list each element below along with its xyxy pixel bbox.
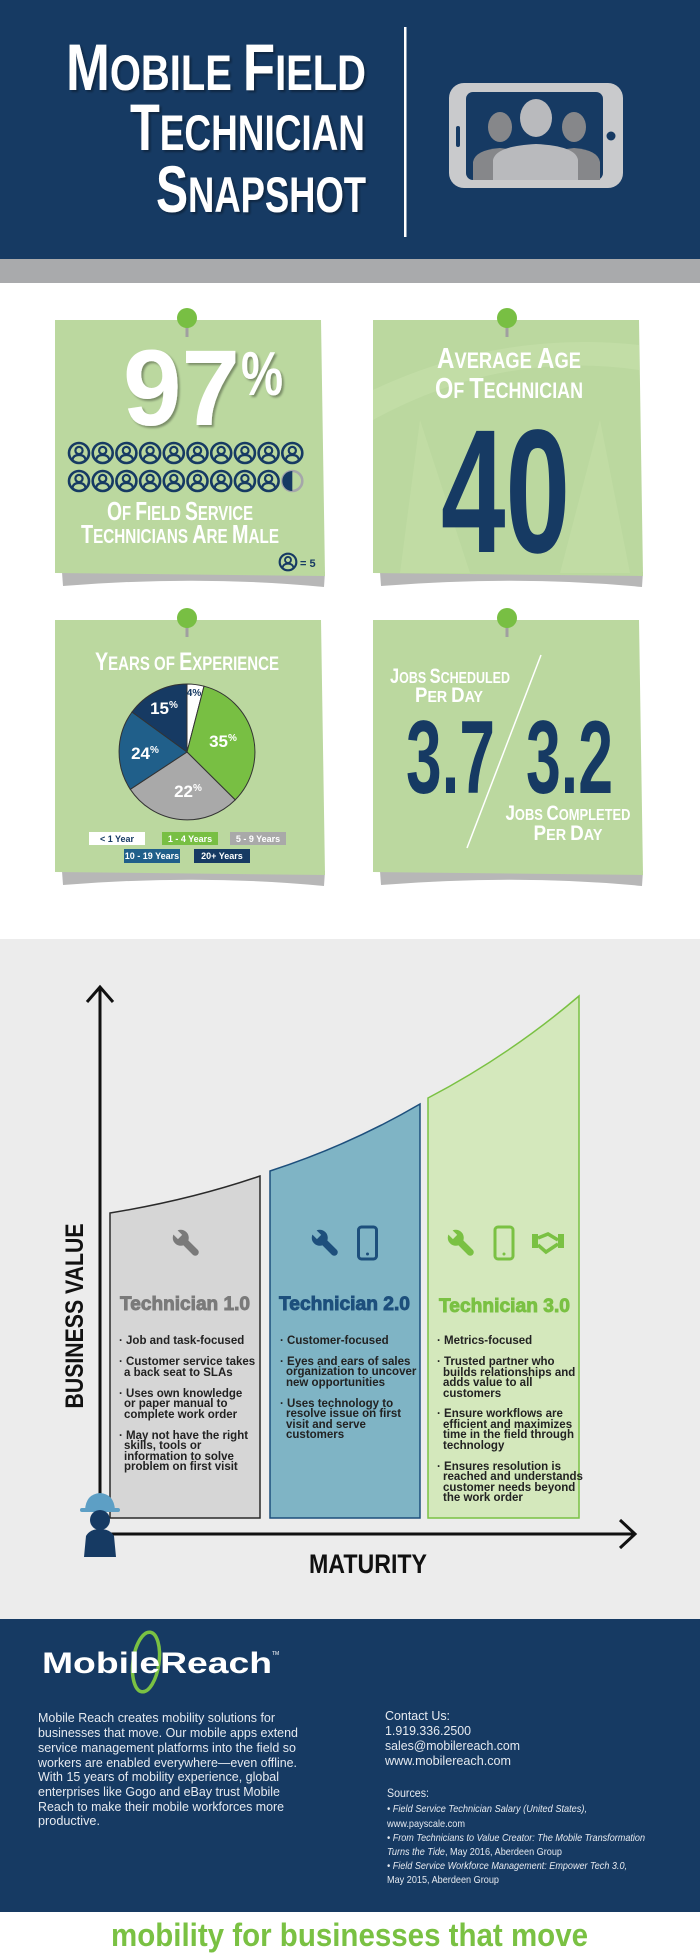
box: technician 3.0: · Metrics-focused [437, 1335, 532, 1347]
sources: Turns the Tide, May 2016, Aberdeen Group [387, 1846, 562, 1858]
stat: 3.7 / 3.2: 3.7 [406, 700, 495, 816]
box: technician 3.0: · Ensures resolution is [437, 1461, 561, 1473]
box: technician 2.0: Technician 2.0 [279, 1294, 410, 1315]
legend: < 1 Year [100, 834, 135, 844]
stat: 97%: 97 [123, 327, 240, 448]
legend: 5 - 9 Years [236, 834, 280, 844]
title: TECHNICIAN [130, 90, 365, 164]
heading: OF TECHNICIAN [435, 373, 583, 405]
card: jobs per day [373, 608, 643, 886]
about text: businesses that move. Our mobile apps extend [38, 1725, 298, 1740]
arrow: y axis [87, 987, 113, 1534]
label: jobs scheduled: JOBS SCHEDULED [390, 665, 510, 688]
sources [386, 1786, 645, 1886]
box: technician 2.0: new opportunities [286, 1377, 385, 1389]
box: technician 1.0: · Uses own knowledge [119, 1388, 242, 1400]
about text: service management platforms into the field so [38, 1740, 296, 1755]
contact: sales@mobilereach.com [385, 1738, 520, 1753]
logo: MobileReach: TM [272, 1651, 279, 1657]
stat: 97%: % [241, 340, 283, 409]
sources: • From Technicians to Value Creator: The Mobile Transformation [387, 1832, 645, 1844]
logo: MobileReach [42, 1630, 279, 1694]
label: jobs completed: JOBS COMPLETED [506, 802, 630, 825]
box: technician 1.0: skills, tools or [124, 1440, 202, 1452]
contact [384, 1708, 520, 1768]
sources: Sources: [387, 1786, 429, 1800]
pie chart: % [228, 733, 237, 744]
tagline: mobility for businesses that move [111, 1917, 588, 1953]
box: technician 1.0: a back seat to SLAs [124, 1367, 233, 1379]
label: jobs completed [506, 802, 630, 845]
box: technician 3.0: technology [443, 1440, 505, 1452]
box: technician 3.0: builds relationships and [443, 1367, 575, 1379]
sources: • Field Service Workforce Management: Empower Tech 3.0, [387, 1860, 627, 1872]
box: technician 1.0: · Customer service takes [119, 1356, 255, 1368]
box: technician 1.0: Technician 1.0 [120, 1294, 250, 1315]
contact: 1.919.336.2500 [385, 1723, 471, 1738]
icon: wrench [168, 1225, 203, 1260]
box: technician 2.0: resolve issue on first [286, 1408, 401, 1420]
box: technician 1.0: · Job and task-focused [119, 1335, 244, 1347]
box: technician 3.0: · Ensure workflows are [437, 1408, 563, 1420]
icon: phone [495, 1227, 513, 1259]
pie chart [119, 684, 255, 820]
card: years of experience [55, 608, 325, 886]
pie chart: % [193, 783, 202, 794]
heading [435, 343, 583, 405]
contact: Contact Us: [385, 1708, 450, 1723]
box: technician 3.0: · Trusted partner who [437, 1356, 555, 1368]
sources: • Field Service Technician Salary (United States), [387, 1803, 587, 1815]
title: SNAPSHOT [156, 152, 366, 226]
box: technician 2.0 [270, 1104, 420, 1518]
box: technician 3.0: Technician 3.0 [439, 1296, 570, 1317]
card: 97% male [55, 308, 325, 587]
icon: phone with people [449, 83, 623, 188]
box: technician 3.0: customers [443, 1388, 501, 1400]
box: technician 3.0: efficient and maximizes [443, 1419, 572, 1431]
title [66, 30, 366, 226]
stat: 40: 40 [441, 394, 570, 590]
box: technician 3.0: reached and understands [443, 1471, 583, 1483]
label: jobs scheduled: PER DAY [415, 684, 483, 707]
legend: 1 - 4 Years [168, 834, 212, 844]
caption: OF FIELD SERVICE [107, 496, 253, 526]
header banner [0, 0, 700, 283]
box: technician 1.0: information to solve [124, 1451, 234, 1463]
box: technician 1.0 [110, 1176, 260, 1518]
icon: phone [358, 1227, 376, 1259]
icon: wrench [307, 1225, 342, 1260]
about text: Reach to make their mobile workforces more [38, 1799, 284, 1814]
about text: workers are enabled everywhere—even offline. [37, 1755, 297, 1770]
axis label: business value: BUSINESS VALUE [61, 1224, 89, 1408]
axis label: maturity: MATURITY [309, 1549, 427, 1579]
arrow: x axis [100, 1520, 635, 1548]
box: technician 3.0 [428, 996, 583, 1518]
icon: wrench [443, 1225, 478, 1260]
pie chart: 4% [187, 688, 201, 699]
box: technician 3.0: adds value to all [443, 1377, 532, 1389]
caption: TECHNICIANS ARE MALE [81, 519, 279, 549]
about text: Mobile Reach creates mobility solutions for [38, 1710, 276, 1725]
about text: productive. [38, 1813, 100, 1828]
box: technician 2.0: · Customer-focused [280, 1335, 389, 1347]
sources: www.payscale.com [386, 1818, 465, 1830]
box: technician 1.0: complete work order [124, 1409, 238, 1421]
heading: AVERAGE AGE [437, 343, 581, 375]
heading: YEARS OF EXPERIENCE [95, 648, 279, 676]
contact: www.mobilereach.com [384, 1753, 511, 1768]
box: technician 2.0: customers [286, 1429, 344, 1441]
label: jobs completed: PER DAY [534, 822, 603, 845]
box: technician 1.0: · May not have the right [119, 1430, 248, 1442]
sources: May 2015, Aberdeen Group [387, 1874, 499, 1886]
about text: With 15 years of mobility experience, global [38, 1769, 279, 1784]
pie chart: 22 [174, 782, 193, 801]
maturity chart section [0, 939, 700, 1620]
box: technician 1.0: problem on first visit [124, 1461, 238, 1473]
about text: enterprises like Gogo and eBay trust Mobile [38, 1784, 280, 1799]
legend: icon = 5: = 5 [300, 558, 316, 570]
footer [0, 1619, 700, 1912]
logo: MobileReach: MobileReach [42, 1647, 272, 1680]
about text [37, 1710, 298, 1828]
box: technician 2.0: · Eyes and ears of sales [280, 1356, 410, 1368]
legend: 20+ Years [201, 851, 243, 861]
box: technician 1.0: or paper manual to [124, 1398, 228, 1410]
caption [81, 496, 279, 549]
icon: handshake [532, 1234, 564, 1252]
box: technician 2.0: organization to uncover [286, 1366, 417, 1378]
icon array: 20 people [69, 443, 302, 491]
box: technician 3.0: the work order [443, 1492, 523, 1504]
pie chart: 35 [209, 732, 228, 751]
pie chart: 15 [150, 699, 169, 718]
legend [89, 832, 286, 863]
card: average age [373, 308, 643, 590]
box: technician 2.0: · Uses technology to [280, 1398, 393, 1410]
pie chart: 24 [131, 744, 150, 763]
title: MOBILE FIELD [66, 30, 366, 104]
pie chart: % [150, 745, 159, 756]
pie chart: % [169, 700, 178, 711]
legend: icon = 5 [280, 554, 316, 570]
stat: 3.7 / 3.2: 3.2 [526, 700, 613, 816]
box: technician 2.0: visit and serve [286, 1419, 366, 1431]
legend: 10 - 19 Years [125, 851, 179, 861]
stat: 3.7 / 3.2 [406, 655, 613, 848]
box: technician 3.0: time in the field through [443, 1429, 574, 1441]
icon: technician figure [80, 1493, 120, 1557]
box: technician 3.0: customer needs beyond [443, 1482, 575, 1494]
label: jobs scheduled [390, 665, 510, 707]
